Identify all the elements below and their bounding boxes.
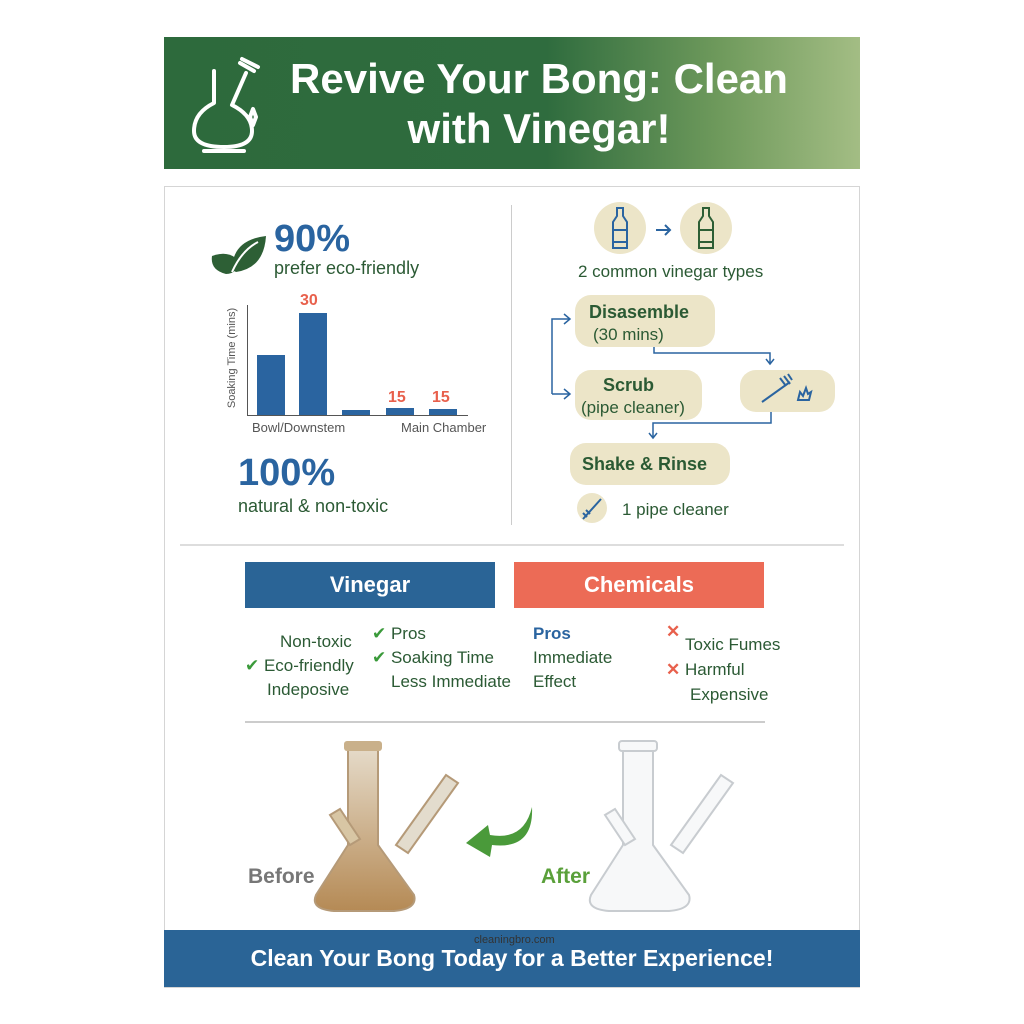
- title: Revive Your Bong: Clean with Vinegar!: [290, 55, 788, 152]
- flowchart: 1 pipe cleaner: [622, 500, 729, 519]
- stat: 100%: 100%: [238, 452, 335, 494]
- bar chart: soaking time: Soaking Time (mins): [226, 308, 238, 408]
- list: vinegar pros: Less Immediate: [391, 672, 511, 691]
- stat: 90%: [212, 218, 420, 278]
- text: vinegar types: 2 common vinegar types: [578, 262, 763, 281]
- step: disassemble: [575, 295, 715, 347]
- stat: 90%: prefer eco-friendly: [274, 258, 419, 278]
- main panel: [164, 186, 860, 988]
- bar chart: soaking time: [226, 292, 486, 435]
- stat: 100%: [238, 452, 388, 516]
- list: vinegar pros: [245, 624, 511, 699]
- header: vinegar: [245, 562, 495, 608]
- list: chemicals: Toxic Fumes: [685, 635, 780, 654]
- label: before: Before: [248, 865, 315, 888]
- list: chemicals: Effect: [533, 672, 576, 691]
- icon: vinegar bottles: [594, 202, 732, 254]
- bar chart: soaking time: 15: [432, 389, 450, 406]
- step: scrub: (pipe cleaner): [581, 398, 685, 417]
- image: dirty bong before: [314, 741, 460, 912]
- header: vinegar: Vinegar: [330, 572, 410, 597]
- list: chemicals: Pros: [533, 624, 571, 643]
- bar chart: soaking time: 30: [300, 292, 318, 309]
- list: chemicals: ✕ Harmful: [666, 660, 744, 679]
- list: chemicals: ✕: [666, 622, 680, 641]
- arrow: curved green: [466, 807, 532, 857]
- icon: pipe cleaner: [577, 493, 607, 523]
- footer banner: cleaningbro.com: [474, 934, 555, 946]
- header banner: [164, 37, 860, 169]
- image: clean bong after: [588, 740, 734, 912]
- step: shake & rinse: Shake & Rinse: [582, 454, 707, 474]
- bar chart: soaking time: 15: [388, 389, 406, 406]
- label: after: After: [541, 865, 590, 888]
- stat: 90%: 90%: [274, 218, 350, 260]
- list: chemicals: Immediate: [533, 648, 612, 667]
- list: vinegar pros: ✔ Soaking Time: [372, 648, 494, 667]
- header: chemicals: Chemicals: [584, 572, 694, 597]
- icon: bong: [192, 56, 260, 153]
- footer banner: [164, 930, 860, 987]
- bar chart: soaking time: Main Chamber: [401, 420, 486, 435]
- step: shake & rinse: [570, 443, 730, 485]
- step: scrub: [575, 370, 702, 420]
- step: disassemble: Disasemble: [589, 302, 689, 322]
- list: vinegar pros: ✔ Eco-friendly: [245, 656, 354, 675]
- step: scrub: Scrub: [603, 375, 654, 395]
- header: chemicals: [514, 562, 764, 608]
- footer banner: Clean Your Bong Today for a Better Experience!: [251, 945, 773, 971]
- list: vinegar pros: Indeposive: [267, 680, 349, 699]
- stat: 100%: natural & non-toxic: [238, 496, 388, 516]
- list: vinegar pros: Non-toxic: [280, 632, 352, 651]
- list: chemicals: Expensive: [690, 685, 768, 704]
- icon: brush splash: [740, 370, 835, 412]
- flowchart: [551, 295, 835, 523]
- step: disassemble: (30 mins): [593, 325, 664, 344]
- list: vinegar pros: ✔ Pros: [372, 624, 426, 643]
- list: chemicals: [533, 622, 780, 704]
- bar chart: soaking time: Bowl/Downstem: [252, 420, 345, 435]
- icon: leaf: [212, 236, 266, 274]
